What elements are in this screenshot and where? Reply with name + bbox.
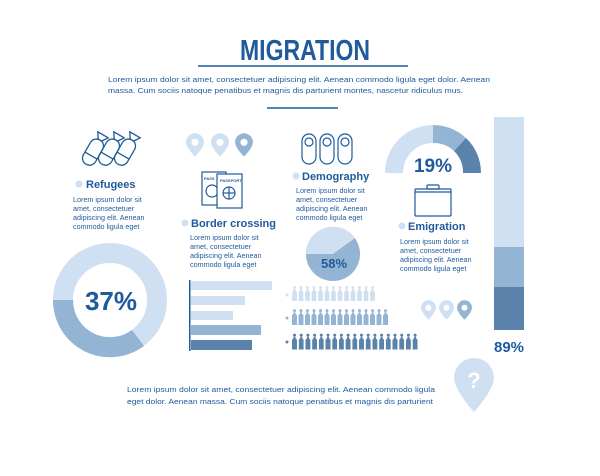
icon: passports: PASS: [204, 176, 215, 181]
panel: border crossing: adipiscing elit. Aenean: [190, 251, 262, 260]
footer text: eget dolor. Aenean massa. Cum sociis natoque penatibus et magnis dis parturient: [127, 397, 433, 406]
panel: border crossing: commodo ligula eget: [190, 260, 256, 269]
icon: pins right: [421, 300, 472, 320]
icon: question pin: ?: [467, 368, 481, 393]
icon: passports: PASSPORT: [220, 178, 242, 183]
bar chart: [189, 280, 272, 351]
footer text: Lorem ipsum dolor sit amet, consectetuer adipiscing elit. Aenean commodo ligula: [127, 385, 435, 394]
panel: refugees: commodo ligula eget: [73, 222, 139, 231]
panel: refugees: Lorem ipsum dolor sit: [73, 195, 142, 204]
donut 37%: 37%: [85, 286, 137, 316]
stacked bar 89%: [494, 117, 524, 356]
icon: babies: [302, 134, 352, 164]
panel: border crossing: amet, consectetuer: [190, 242, 252, 251]
panel: refugees: amet, consectetuer: [73, 204, 135, 213]
intro text: Lorem ipsum dolor sit amet, consectetuer adipiscing elit. Aenean commodo ligula eget dolor. Aenean: [108, 75, 490, 84]
icon: suitcase: [415, 185, 451, 216]
donut 37%: [53, 253, 157, 357]
panel: demography: adipiscing elit. Aenean: [296, 204, 368, 213]
icon: question pin: [454, 358, 494, 412]
panel: demography: Demography: [302, 171, 370, 183]
panel: emigration: adipiscing elit. Aenean: [400, 255, 472, 264]
intro text: massa. Cum sociis natoque penatibus et magnis dis parturient montes, nascetur ridiculus mus.: [108, 86, 463, 95]
panel: demography: amet, consectetuer: [296, 195, 358, 204]
pie chart 58%: 58%: [321, 256, 347, 271]
panel: refugees: adipiscing elit. Aenean: [73, 213, 145, 222]
panel: emigration: commodo ligula eget: [400, 264, 466, 273]
pie chart 58%: [306, 227, 360, 281]
panel: refugees: [73, 179, 145, 231]
panel: refugees: Refugees: [86, 179, 136, 191]
panel: emigration: Emigration: [408, 221, 466, 233]
footer text: [127, 385, 435, 406]
panel: border crossing: [182, 218, 276, 269]
panel: demography: [292, 171, 370, 222]
panel: border crossing: Lorem ipsum dolor sit: [190, 233, 259, 242]
stacked bar 89%: 89%: [494, 339, 524, 356]
panel: border crossing: Border crossing: [191, 218, 276, 230]
panel: emigration: Lorem ipsum dolor sit: [400, 237, 469, 246]
title: MIGRATION: [240, 35, 370, 67]
panel: emigration: [398, 221, 472, 273]
gauge 19%: [385, 125, 481, 177]
panel: demography: Lorem ipsum dolor sit: [296, 186, 365, 195]
icon: refugees: [80, 131, 141, 168]
gauge 19%: 19%: [414, 156, 452, 177]
panel: emigration: amet, consectetuer: [400, 246, 462, 255]
icon: pins top: [186, 133, 253, 157]
icon: passports: [202, 172, 242, 208]
people chart: [286, 286, 418, 350]
intro text: [108, 75, 490, 108]
panel: demography: commodo ligula eget: [296, 213, 362, 222]
